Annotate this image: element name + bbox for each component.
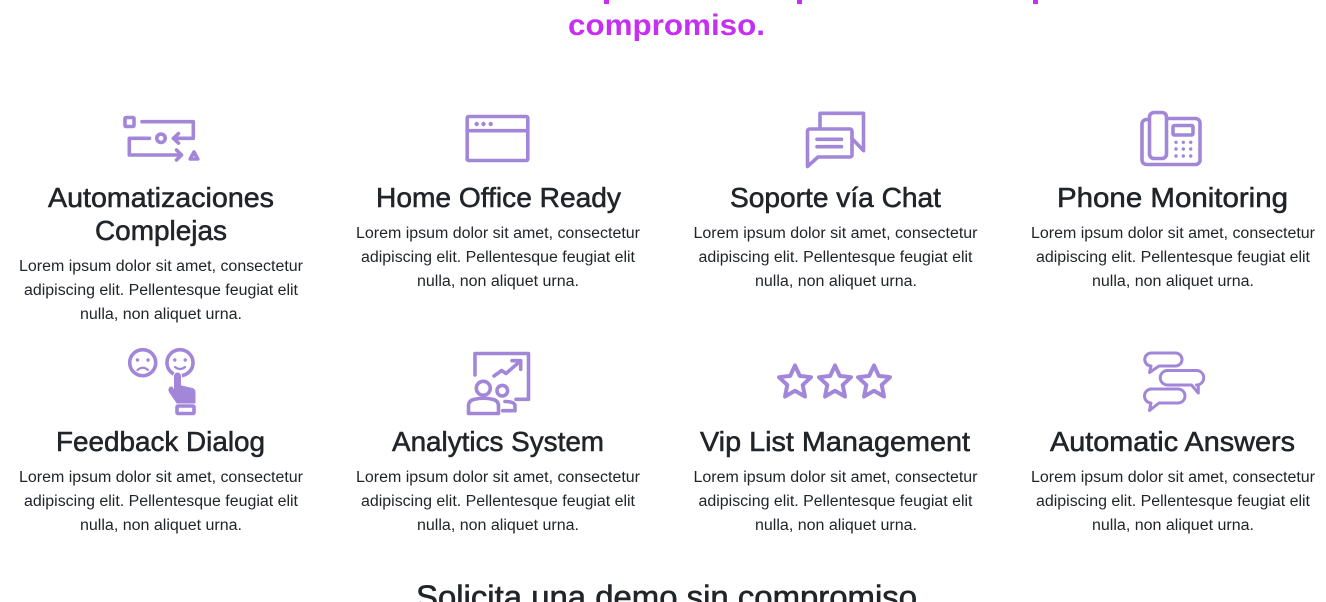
text block: Lorem ipsum dolor sit amet, consectetur (19, 258, 303, 275)
text block: adipiscing elit. Pellentesque feugiat elit (24, 282, 299, 299)
title: clipped heading (568, 0, 1038, 42)
text block: adipiscing elit. Pellentesque feugiat elit (361, 249, 636, 266)
panel: Soporte via Chat (694, 113, 978, 290)
panel: Automatic Answers (1031, 353, 1315, 534)
text block (19, 258, 303, 323)
text block: Lorem ipsum dolor sit amet, consectetur (1031, 469, 1315, 486)
text block: adipiscing elit. Pellentesque feugiat elit (361, 493, 636, 510)
text block: nulla, non aliquet urna. (417, 273, 579, 290)
icon: chat bubbles (808, 113, 864, 166)
text block: adipiscing elit. Pellentesque feugiat elit (698, 493, 973, 510)
text block: Lorem ipsum dolor sit amet, consectetur (694, 225, 978, 242)
heading: Complejas (95, 215, 227, 246)
icon: feedback faces and hand (130, 350, 196, 414)
text block (1031, 469, 1315, 534)
icon: presentation board with people (468, 354, 528, 414)
panel: Home Office Ready (356, 116, 640, 290)
text block (19, 469, 303, 534)
text block: Lorem ipsum dolor sit amet, consectetur (1031, 225, 1315, 242)
heading: Automatizaciones (48, 182, 274, 213)
title: clipped heading: compromiso. (568, 9, 765, 42)
text block: Lorem ipsum dolor sit amet, consectetur (694, 469, 978, 486)
text block: nulla, non aliquet urna. (417, 517, 579, 534)
text block: Lorem ipsum dolor sit amet, consectetur (19, 469, 303, 486)
text block (694, 469, 978, 534)
text block: nulla, non aliquet urna. (80, 306, 242, 323)
icon: browser window (467, 116, 528, 160)
text block (1031, 225, 1315, 290)
text block: nulla, non aliquet urna. (1092, 517, 1254, 534)
panel: Phone Monitoring (1031, 112, 1315, 290)
text block: Lorem ipsum dolor sit amet, consectetur (356, 225, 640, 242)
panel: Analytics System (356, 354, 640, 534)
text block (694, 225, 978, 290)
heading: Analytics System (392, 426, 604, 457)
text block: adipiscing elit. Pellentesque feugiat elit (698, 249, 973, 266)
heading: Soporte vía Chat (730, 182, 941, 213)
text block: adipiscing elit. Pellentesque feugiat elit (24, 493, 299, 510)
heading (48, 182, 274, 246)
text block: adipiscing elit. Pellentesque feugiat elit (1036, 493, 1311, 510)
text block: nulla, non aliquet urna. (80, 517, 242, 534)
panel: Vip List Management (694, 366, 978, 534)
text block: Lorem ipsum dolor sit amet, consectetur (356, 469, 640, 486)
text block (356, 469, 640, 534)
panel: Automatizaciones Complejas (19, 118, 303, 323)
text block (356, 225, 640, 290)
heading: Phone Monitoring (1057, 182, 1288, 213)
heading: Vip List Management (700, 426, 970, 457)
text block: nulla, non aliquet urna. (755, 517, 917, 534)
icon: three stars (779, 366, 890, 396)
heading: Automatic Answers (1050, 426, 1295, 457)
text block: nulla, non aliquet urna. (1092, 273, 1254, 290)
icon: desk phone (1142, 112, 1200, 164)
icon: stacked speech bubbles (1144, 353, 1204, 410)
panel: Feedback Dialog (19, 350, 303, 534)
heading: Home Office Ready (376, 182, 621, 213)
text block: adipiscing elit. Pellentesque feugiat elit (1036, 249, 1311, 266)
heading: Feedback Dialog (56, 426, 265, 457)
text block: nulla, non aliquet urna. (755, 273, 917, 290)
icon: automation flow (125, 118, 198, 160)
